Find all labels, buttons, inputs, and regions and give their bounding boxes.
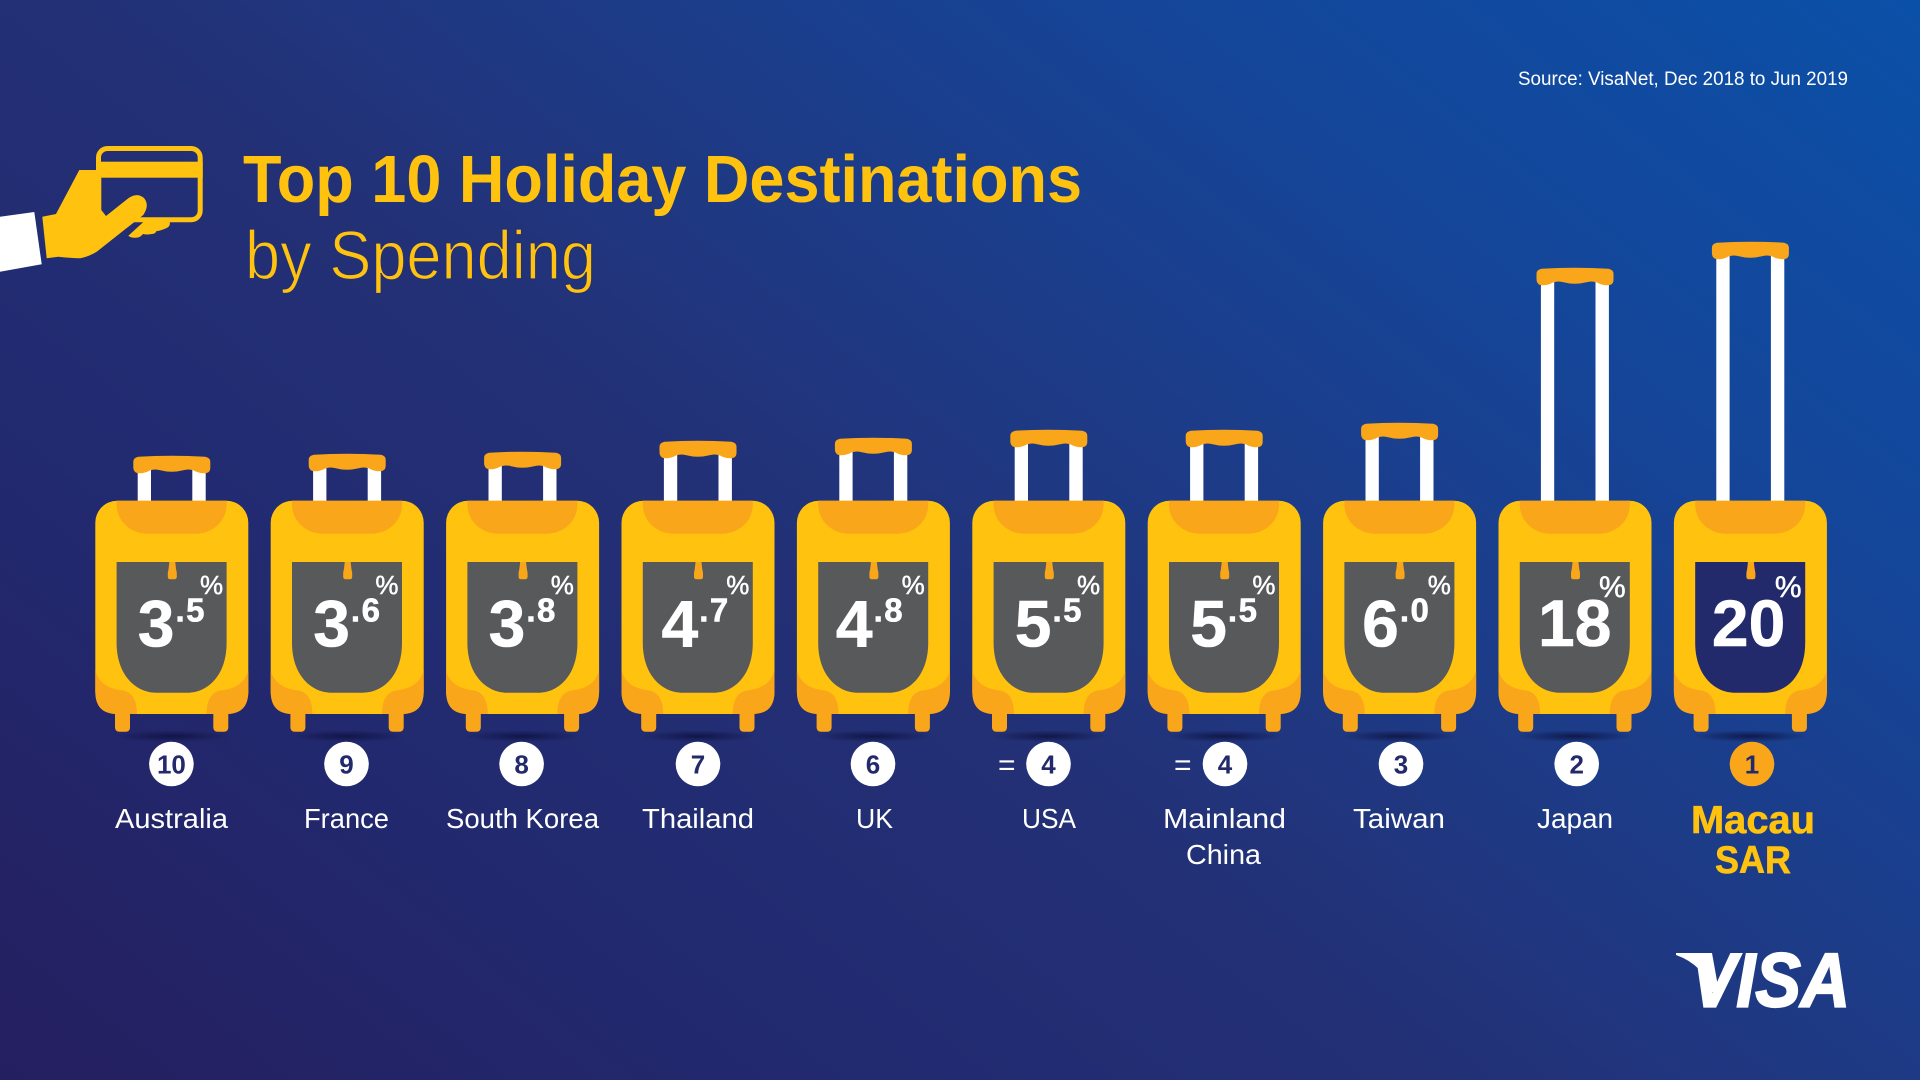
rank 6: 6	[866, 750, 880, 780]
rank equal 4 (Mainland China): =	[1174, 749, 1192, 782]
suitcase: Macau SAR 20%: %	[1775, 571, 1802, 604]
suitcase: UK 4.8%	[797, 438, 950, 742]
suitcase: South Korea 3.8%: %	[551, 570, 574, 600]
rank 10	[149, 742, 194, 786]
suitcase: Taiwan 6.0%: .0	[1400, 592, 1430, 629]
suitcase: Thailand 4.7%: .7	[699, 592, 730, 629]
rank equal 4 (USA)	[998, 742, 1071, 786]
rank 9: 9	[339, 750, 354, 780]
suitcase: France 3.6%: %	[375, 570, 399, 600]
source note: Source: VisaNet, Dec 2018 to Jun 2019	[1518, 69, 1848, 90]
label: Mainland China: China	[1186, 839, 1261, 870]
suitcase: France 3.6%: 3	[313, 587, 350, 661]
suitcase: South Korea 3.8%: .8	[526, 592, 557, 629]
suitcase: Japan 18%: %	[1599, 571, 1626, 604]
suitcase: Japan 18%: 18	[1538, 586, 1611, 660]
title: Top 10 Holiday Destinations	[243, 142, 1082, 217]
rank 9	[324, 742, 369, 786]
suitcase: Taiwan 6.0%: 6	[1362, 587, 1399, 661]
suitcase: Mainland China 5.5%: .5	[1228, 592, 1258, 629]
suitcase: Taiwan 6.0%: %	[1428, 570, 1451, 600]
suitcase: UK 4.8%: .8	[874, 592, 904, 629]
suitcase: Australia 3.5%: .5	[176, 592, 206, 629]
label: Macau SAR	[1691, 799, 1815, 882]
label: Taiwan: Taiwan	[1353, 803, 1445, 834]
rank 3: 3	[1394, 750, 1408, 780]
rank 7: 7	[691, 750, 705, 780]
rank 6	[851, 742, 895, 786]
suitcase: USA 5.5%: %	[1077, 570, 1100, 600]
suitcase: France 3.6%	[271, 454, 424, 742]
suitcase: South Korea 3.8%	[446, 452, 599, 742]
rank equal 4 (USA): =	[998, 749, 1016, 782]
label: Mainland China	[1163, 803, 1286, 870]
suitcase: Thailand 4.7%: 4	[662, 587, 698, 661]
suitcase: Australia 3.5%: 3	[138, 587, 175, 661]
rank 1: 1	[1745, 750, 1759, 780]
label: Australia: Australia	[115, 803, 228, 834]
icon: hand holding credit card	[0, 148, 203, 272]
suitcase: USA 5.5%: .5	[1053, 592, 1083, 629]
suitcase: Australia 3.5%: %	[200, 570, 223, 600]
rank 1	[1730, 742, 1774, 786]
label: USA: USA	[1022, 803, 1076, 834]
logo: VISA: VISA	[1691, 938, 1850, 1024]
rank 10: 10	[157, 750, 186, 780]
suitcase: Thailand 4.7%: %	[726, 570, 749, 600]
rank 8	[499, 742, 544, 786]
suitcase: UK 4.8%: %	[902, 570, 925, 600]
rank 7	[676, 742, 720, 786]
label: Macau SAR: SAR	[1715, 839, 1791, 882]
label: Mainland China: Mainland	[1163, 803, 1286, 834]
suitcase: Japan 18%	[1498, 268, 1652, 742]
label: South Korea: South Korea	[446, 803, 599, 834]
suitcase: Macau SAR 20%	[1674, 242, 1827, 742]
suitcase: France 3.6%: .6	[351, 592, 381, 629]
suitcase: Macau SAR 20%: 20	[1712, 586, 1785, 660]
rank equal 4 (Mainland China)	[1174, 742, 1247, 786]
suitcase: Mainland China 5.5%: %	[1252, 570, 1276, 600]
rank 3	[1379, 742, 1423, 786]
suitcase: USA 5.5%	[972, 430, 1125, 742]
title	[243, 142, 1082, 294]
suitcase: South Korea 3.8%: 3	[489, 587, 525, 661]
label: France: France	[304, 803, 389, 834]
rank equal 4 (USA): 4	[1041, 750, 1056, 780]
suitcase: Taiwan 6.0%	[1323, 423, 1476, 742]
title: by Spending	[245, 217, 596, 294]
label: Japan: Japan	[1537, 803, 1613, 834]
rank equal 4 (Mainland China): 4	[1218, 750, 1233, 780]
suitcase: UK 4.8%: 4	[836, 587, 873, 661]
rank 8: 8	[514, 750, 529, 780]
suitcase: Australia 3.5%	[95, 456, 248, 742]
suitcase: Mainland China 5.5%: 5	[1190, 587, 1227, 661]
rank 2: 2	[1569, 750, 1584, 780]
suitcase: Thailand 4.7%	[622, 441, 774, 742]
label: UK: UK	[856, 803, 893, 834]
suitcase: USA 5.5%: 5	[1015, 587, 1052, 661]
label: Macau SAR: Macau	[1691, 799, 1815, 842]
label: Thailand: Thailand	[642, 803, 754, 834]
rank 2	[1554, 742, 1599, 786]
suitcase: Mainland China 5.5%	[1148, 430, 1301, 742]
